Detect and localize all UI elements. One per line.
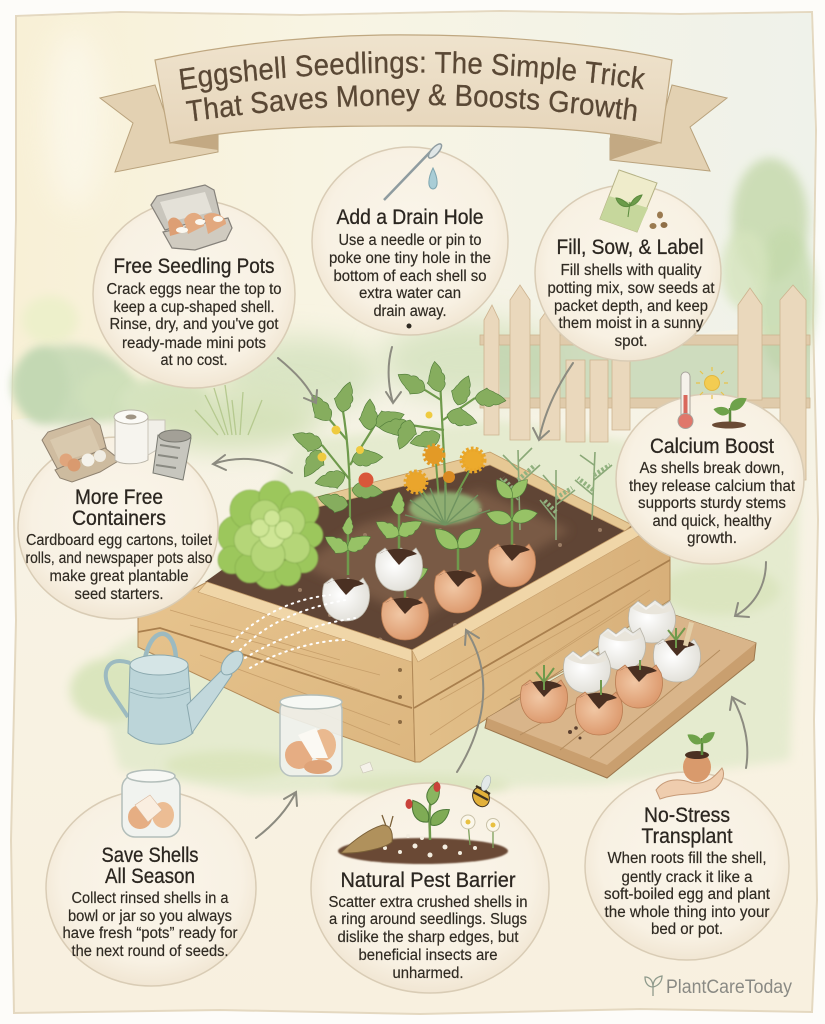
body text: As shells break down, (640, 460, 784, 477)
body text (328, 894, 528, 982)
seedlings in eggshells (321, 475, 539, 640)
heading: Fill, Sow, & Label (556, 235, 704, 259)
arrow: containers (213, 455, 292, 473)
body text: the whole thing into your (604, 904, 770, 921)
heading: Transplant (642, 824, 733, 848)
heading: Calcium Boost (650, 434, 774, 458)
body text (106, 281, 282, 369)
body text: potting mix, sow seeds at (548, 280, 715, 297)
body text: make great plantable (50, 568, 188, 585)
panel: calcium boost (616, 367, 804, 564)
icon: seed packet (600, 170, 668, 232)
heading: More Free (75, 485, 163, 509)
heading (642, 803, 733, 848)
body text: unharmed. (392, 965, 464, 982)
heading: No-Stress (644, 803, 730, 827)
arrow: pest barrier (457, 630, 483, 772)
body text: supports sturdy stems (638, 495, 786, 512)
title banner: That Saves Money & Boosts Growth (186, 84, 637, 122)
body text: Scatter extra crushed shells in (328, 894, 528, 911)
right face (412, 527, 670, 762)
body text: beneficial insects are (358, 947, 498, 964)
panel: add a drain hole (312, 142, 508, 335)
body text: the next round of seeds. (72, 943, 228, 960)
heading: Containers (72, 506, 166, 530)
icon: hole dot (406, 324, 412, 328)
body text: at no cost. (160, 352, 228, 369)
watering can (106, 634, 247, 744)
body text: Collect rinsed shells in a (72, 890, 229, 907)
body text: bowl or jar so you always (68, 908, 232, 925)
icon: egg carton (151, 185, 232, 250)
body text (329, 232, 491, 320)
lettuce (218, 481, 323, 589)
arrow: save shells (256, 792, 297, 838)
body text: Cardboard egg cartons, toilet (26, 532, 213, 549)
body text: When roots fill the shell, (608, 850, 766, 867)
body text: Fill shells with quality (560, 262, 702, 279)
herbs (500, 448, 612, 540)
title banner (99, 34, 728, 173)
body text: drain away. (374, 303, 446, 320)
body text: rolls, and newspaper pots also (26, 550, 212, 567)
icon: carton, rolls and newspaper (42, 410, 191, 482)
panel: save shells all season (46, 770, 256, 986)
watermark: PlantCareToday (666, 977, 792, 998)
body text (26, 532, 213, 603)
background foliage (12, 158, 815, 795)
heading: All Season (105, 864, 195, 888)
icon: thermometer, sun and sprout (678, 367, 749, 428)
body text (629, 460, 796, 547)
ribbon body (155, 35, 672, 143)
arrow: transplant (730, 697, 747, 768)
body text: extra water can (359, 285, 461, 302)
body text: a ring around seedlings. Slugs (329, 911, 527, 928)
body text: bed or pot. (651, 921, 723, 938)
soil (205, 456, 632, 652)
left tail (100, 85, 218, 172)
body text: bottom of each shell so (334, 268, 486, 285)
tomato plants (289, 360, 507, 525)
body text (604, 850, 771, 938)
back rim (305, 452, 632, 531)
left face (138, 582, 415, 762)
body text: and quick, healthy (652, 513, 772, 530)
heading: Add a Drain Hole (336, 205, 484, 229)
icon: jar of shells (122, 770, 180, 837)
body text: Rinse, dry, and you've got (110, 316, 279, 333)
body text: soft-boiled egg and plant (604, 886, 771, 903)
body text: Crack eggs near the top to (106, 281, 282, 298)
panel: no-stress transplant (585, 729, 789, 960)
heading: Natural Pest Barrier (340, 868, 516, 892)
body text: spot. (614, 333, 648, 350)
body text: have fresh “pots” ready for (62, 925, 238, 942)
heading: Save Shells (102, 843, 198, 867)
panel: more free containers (18, 410, 218, 619)
body text: dislike the sharp edges, but (338, 929, 519, 946)
body text (548, 262, 715, 350)
arrow: drain hole (386, 347, 401, 403)
marigolds (405, 446, 490, 525)
panel: free seedling pots (93, 185, 295, 388)
arrow: calcium (735, 562, 766, 617)
water spray (232, 595, 355, 668)
heading (102, 843, 198, 888)
icon: hand with seedling (656, 729, 724, 799)
body text: ready-made mini pots (122, 335, 266, 352)
wooden board with eggshells (485, 600, 756, 778)
arrow: to bed (278, 358, 317, 403)
body text: growth. (687, 530, 737, 547)
body text: them moist in a sunny (558, 315, 704, 332)
body text: Use a needle or pin to (338, 232, 482, 249)
icon: slug, plant, bee (338, 774, 508, 864)
panel: fill, sow and label (535, 170, 721, 361)
title text: Eggshell Seedlings: The Simple Trick (180, 51, 646, 93)
heading (72, 485, 166, 530)
body text (62, 890, 238, 960)
body text: keep a cup-shaped shell. (114, 299, 274, 316)
icon: needle and drop (384, 142, 444, 200)
right tail (610, 85, 727, 171)
grass tuft (195, 385, 262, 435)
panel: natural pest barrier (311, 774, 549, 993)
body text: they release calcium that (629, 478, 796, 495)
wooden fence (480, 285, 810, 480)
body text: packet depth, and keep (554, 298, 708, 315)
arrow: fill (533, 363, 573, 440)
body text: seed starters. (74, 586, 164, 603)
raised bed (138, 452, 670, 762)
body text: poke one tiny hole in the (329, 250, 491, 267)
glass jar near bed (280, 695, 373, 776)
body text: gently crack it like a (622, 869, 753, 886)
heading: Free Seedling Pots (114, 254, 274, 278)
